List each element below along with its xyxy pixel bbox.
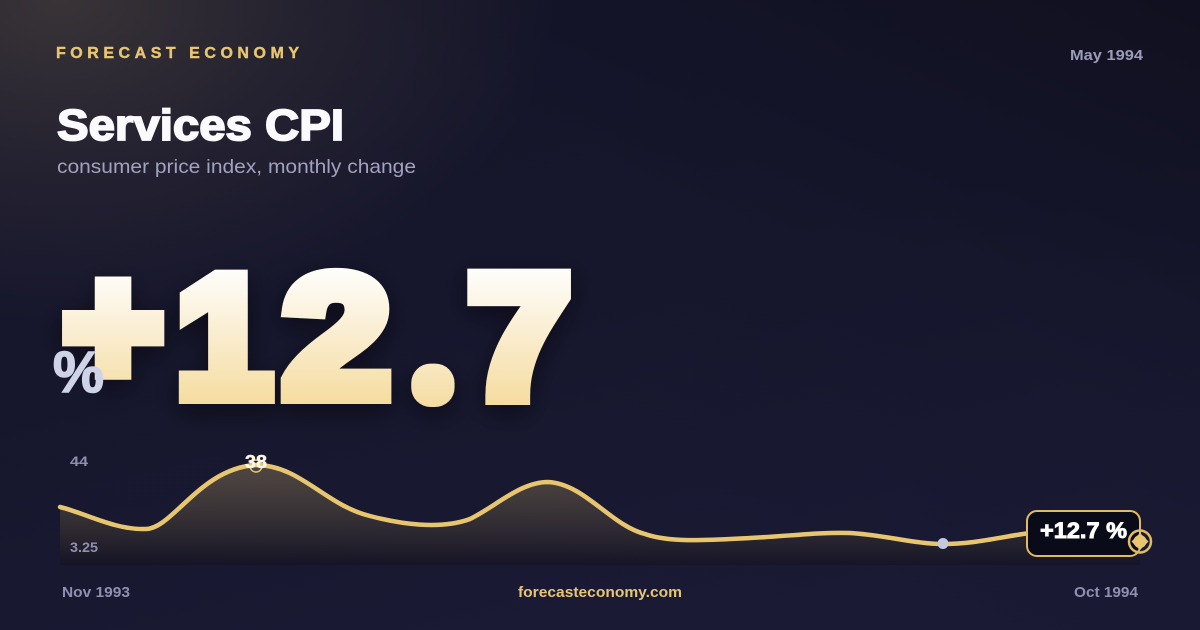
big value: 7 xyxy=(469,241,569,433)
percent unit: % xyxy=(53,340,104,405)
peak label: 38 xyxy=(245,452,267,472)
title: Services CPI xyxy=(57,101,344,150)
big value: 2 xyxy=(283,241,390,433)
chart area fill xyxy=(60,465,1140,565)
website: forecasteconomy.com xyxy=(518,584,682,601)
low point marker xyxy=(938,538,948,549)
peak marker xyxy=(250,460,262,472)
end point marker xyxy=(1129,530,1151,552)
end value callout: +12.7 % xyxy=(1040,518,1127,543)
axis max label: 44 xyxy=(70,453,88,469)
big value xyxy=(64,232,569,433)
brand label: FORECAST ECONOMY xyxy=(56,45,299,62)
big value: + xyxy=(64,232,162,420)
date: May 1994 xyxy=(1070,47,1144,64)
end date: Oct 1994 xyxy=(1074,584,1139,601)
chart line xyxy=(60,465,1030,544)
big value: . xyxy=(429,362,437,395)
big value: 1 xyxy=(176,241,272,433)
end value callout xyxy=(1027,511,1140,556)
subtitle: consumer price index, monthly change xyxy=(57,156,416,178)
axis min label: 3.25 xyxy=(70,539,98,555)
line chart xyxy=(60,452,1151,565)
start date: Nov 1993 xyxy=(62,584,130,601)
